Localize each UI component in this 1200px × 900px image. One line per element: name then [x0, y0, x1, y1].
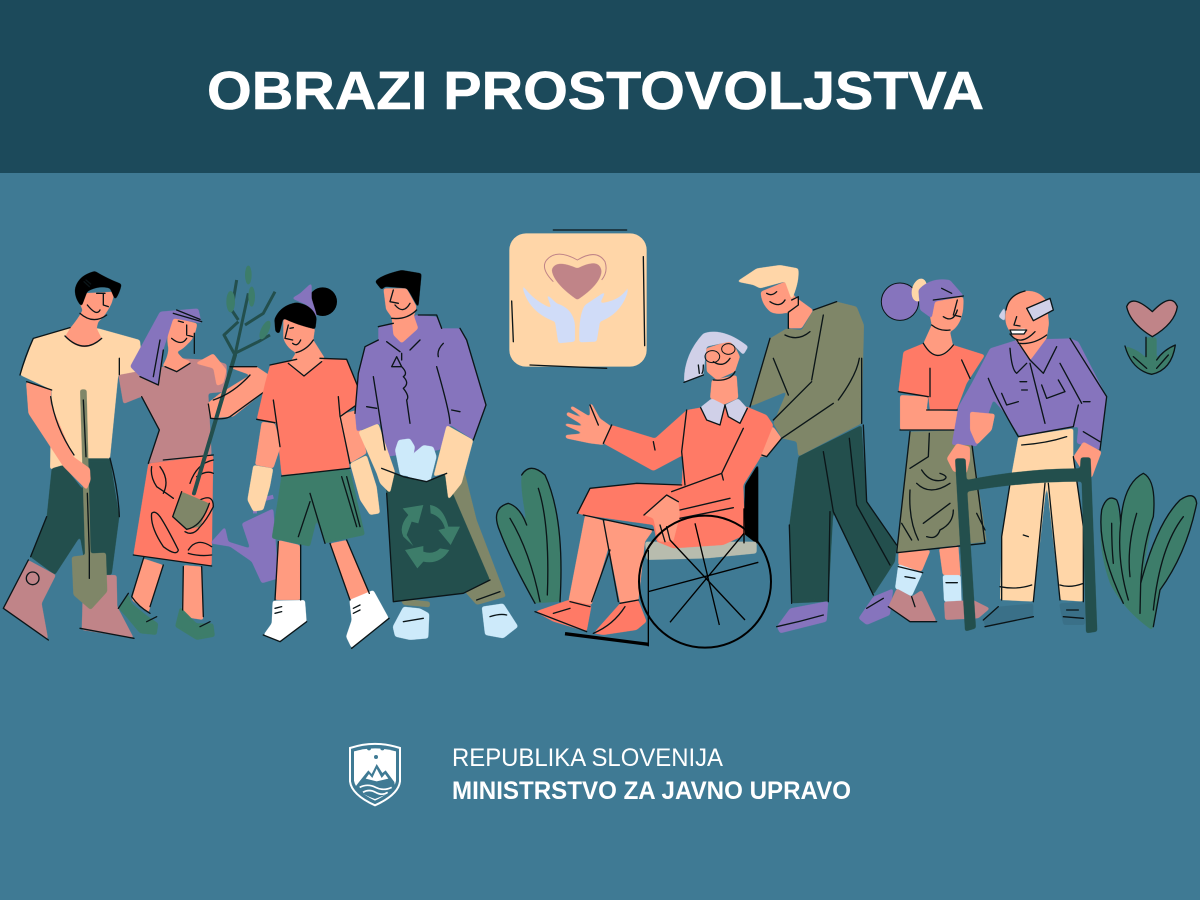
figure: elderly woman in wheelchair: [535, 332, 773, 635]
figure: woman in coral shirt with hair bun: [247, 283, 389, 648]
group: plants, wheelchair user and helper: [496, 265, 897, 648]
figure: man with shovel: [3, 271, 143, 640]
icon: hands holding a heart: [509, 230, 647, 368]
icon: watering can: [210, 497, 278, 583]
header band: OBRAZI PROSTOVOLJSTVA: [207, 61, 984, 121]
icon: young tree with spade: [173, 266, 275, 529]
figure: man in purple hoodie with recycling bag: [355, 270, 518, 640]
group: recycling and watering: [210, 270, 518, 648]
header band: [0, 0, 1200, 173]
group: caring pair and garden: [881, 277, 1197, 633]
figure: helper pushing wheelchair: [737, 265, 897, 633]
figure: old man with walker: [947, 291, 1107, 633]
figure: woman with purple hair and skirt: [118, 308, 227, 640]
logo: coat of arms of Slovenia: [350, 744, 400, 805]
logo wordmark: MINISTRSTVO ZA JAVNO UPRAVO: [452, 777, 851, 805]
logo wordmark: [452, 744, 851, 805]
icon: flower with heart: [1125, 300, 1177, 374]
icon: left plant: [496, 468, 561, 603]
icon: right plant: [1100, 473, 1197, 630]
group: volunteers with shovel and tree: [3, 266, 275, 640]
icon: recycling symbol on bag: [402, 505, 460, 568]
icon: wheelchair: [565, 508, 771, 648]
figure: woman in coral top: [881, 277, 995, 622]
logo wordmark: REPUBLIKA SLOVENIJA: [452, 744, 723, 772]
